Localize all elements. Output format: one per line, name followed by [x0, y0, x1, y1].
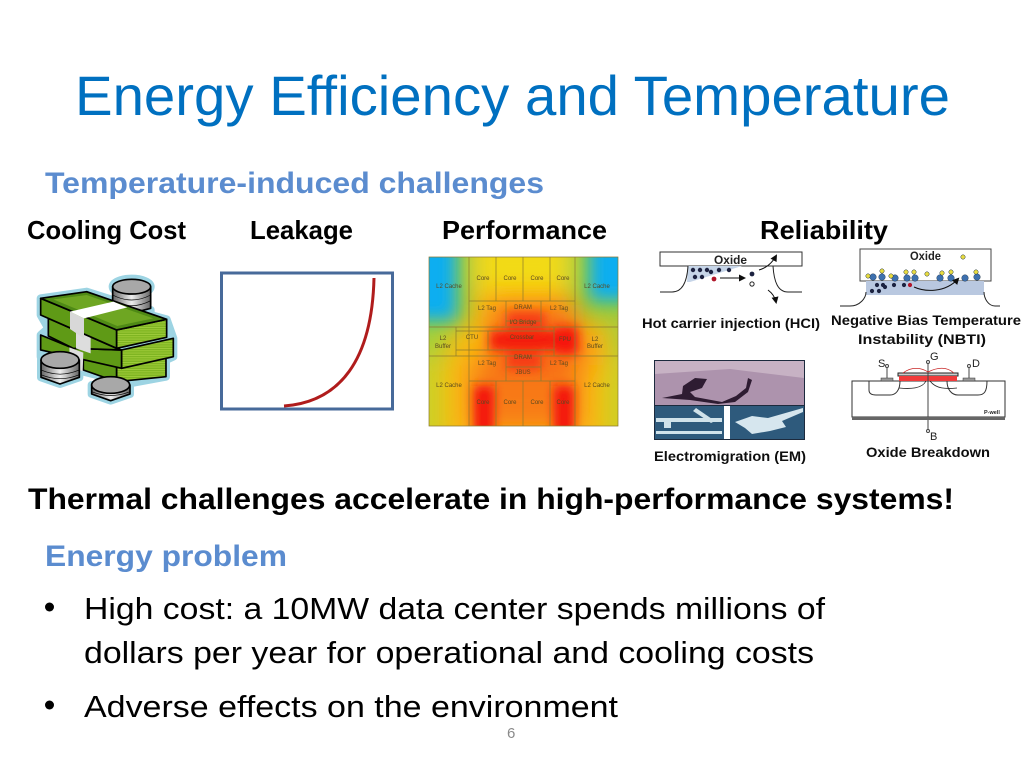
- heading: temperature-induced challenges: Temperature-induced challenges: [45, 167, 544, 200]
- block labels: L2: [440, 336, 447, 342]
- diagram: hot carrier injection: [642, 252, 820, 331]
- carrier arrow: up: [759, 256, 776, 270]
- carrier arrow: forward: [720, 277, 744, 279]
- icon halo: [41, 279, 173, 401]
- block labels: L2 Cache: [436, 383, 463, 389]
- carrier arrow: [914, 279, 958, 290]
- middle bill bundle: [41, 318, 173, 372]
- carriers: [870, 283, 906, 293]
- substrate: [852, 381, 1005, 417]
- hydrogen atoms: [866, 255, 978, 278]
- channel: [866, 281, 984, 295]
- block labels: L2: [592, 337, 599, 343]
- caption: Electromigration (EM): [654, 448, 806, 464]
- gate stack: [898, 373, 958, 376]
- floorplan lines: [429, 257, 618, 426]
- coin stack: bottom left: [41, 352, 79, 384]
- channel wedge: [687, 266, 742, 282]
- bullet: high cost: [45, 591, 825, 670]
- chart: leakage curve: [222, 273, 392, 409]
- hot carrier: [712, 277, 716, 281]
- diagram: oxide breakdown transistor: P-well: [984, 410, 1000, 416]
- junction curves: [840, 292, 1000, 306]
- carriers: [691, 268, 754, 279]
- block labels: I/O Bridge: [509, 320, 537, 326]
- carrier arrow: down: [768, 290, 776, 302]
- current paths: [903, 368, 954, 373]
- block labels: Crossbar: [510, 335, 534, 341]
- junction curves: [660, 266, 802, 292]
- block labels: Core: [530, 400, 544, 406]
- diagram: oxide breakdown transistor: B: [930, 431, 937, 443]
- block labels: Core: [503, 276, 517, 282]
- block labels: L2 Tag: [550, 306, 568, 312]
- block labels: L2 Tag: [478, 306, 496, 312]
- icon: money stack and coins: [41, 279, 173, 401]
- column heading: reliability: Reliability: [760, 215, 889, 245]
- frame: [654, 360, 805, 440]
- oxide bar: [660, 252, 802, 266]
- block labels: L2 Tag: [478, 361, 496, 367]
- block labels: Buffer: [435, 344, 451, 350]
- block labels: Core: [503, 400, 517, 406]
- block labels: DRAM: [514, 305, 532, 311]
- top bill bundle: [41, 292, 167, 348]
- hot carrier: [908, 283, 912, 287]
- slide number: 6: [507, 725, 515, 742]
- column heading: cooling cost: Cooling Cost: [27, 215, 186, 245]
- block labels: L2 Tag: [550, 361, 568, 367]
- block labels: Core: [476, 400, 490, 406]
- purple micrograph: [655, 361, 804, 405]
- bullet: high cost: dollars per year for operational and cooling costs: [84, 635, 814, 670]
- block labels: L2 Cache: [584, 383, 611, 389]
- empty carrier: [750, 282, 754, 286]
- block labels: Core: [556, 400, 570, 406]
- block labels: Core: [556, 276, 570, 282]
- diagram: oxide breakdown transistor: G: [930, 351, 939, 363]
- block labels: L2 Cache: [584, 284, 611, 290]
- block labels: JBUS: [515, 370, 531, 376]
- caption: Oxide Breakdown: [866, 444, 990, 460]
- wells: [869, 381, 987, 395]
- diagram: electromigration micrographs: [654, 360, 806, 464]
- block labels: [435, 276, 611, 406]
- block labels: DRAM: [514, 355, 532, 361]
- block labels: L2 Cache: [436, 284, 463, 290]
- block labels: Core: [530, 276, 544, 282]
- block labels: FPU: [559, 337, 571, 343]
- terminal labels: S: [878, 358, 885, 370]
- coin stack: bottom centre: [92, 377, 130, 401]
- heading: energy problem: Energy problem: [45, 540, 287, 573]
- caption: Hot carrier injection (HCI): [642, 315, 820, 331]
- bullet: adverse effects: Adverse effects on the environment: [84, 689, 618, 724]
- block labels: Buffer: [587, 344, 603, 350]
- coin stack: top right: [113, 279, 151, 313]
- diagram: oxide breakdown transistor: [852, 351, 1005, 460]
- bullet: high cost: High cost: a 10MW data center spends millions of: [84, 591, 825, 626]
- column heading: performance: Performance: [442, 215, 607, 245]
- block labels: CTU: [466, 335, 478, 341]
- oxide label: Oxide: [714, 253, 747, 267]
- title: Energy Efficiency and Temperature: [75, 64, 950, 127]
- blue micrograph: [655, 406, 804, 439]
- caption: Negative Bias Temperature: [831, 312, 1021, 328]
- callout: thermal challenges: Thermal challenges accelerate in high-performance systems!: [28, 483, 954, 516]
- diagram: negative bias temperature instability: [831, 249, 1021, 347]
- diagram: negative bias temperature instability: Instability (NBTI): [858, 331, 986, 347]
- diagram: oxide breakdown transistor: D: [972, 358, 980, 370]
- exponential curve: [284, 278, 374, 406]
- oxide label: Oxide: [910, 249, 941, 263]
- column heading: leakage: Leakage: [250, 215, 353, 245]
- heat colours: [429, 257, 618, 426]
- oxide block: [860, 249, 991, 281]
- interface atoms: [870, 274, 980, 281]
- chart: chip thermal heatmap: [428, 256, 618, 426]
- terminals: [887, 362, 969, 431]
- chart frame: [222, 273, 392, 409]
- bottom bill bundle: [83, 353, 166, 382]
- block labels: Core: [476, 276, 490, 282]
